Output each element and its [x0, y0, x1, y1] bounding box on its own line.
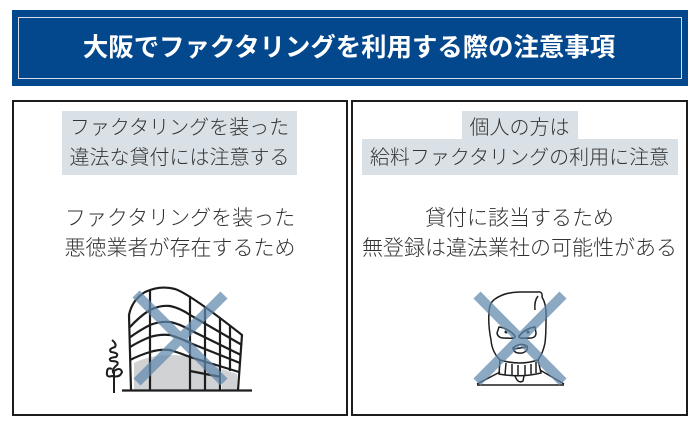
- highlighted heading: right line 2: [362, 139, 678, 175]
- heading text: left: ファクタリングを装った: [70, 117, 289, 139]
- highlighted heading: left: [62, 111, 297, 175]
- ground line: [122, 389, 252, 392]
- body text: right: 無登録は違法業社の可能性がある: [362, 236, 677, 260]
- heading text: left: [70, 117, 290, 168]
- heading text: left: 違法な貸付には注意する: [70, 146, 290, 168]
- body text: left: [64, 207, 296, 260]
- title: 大阪でファクタリングを利用する際の注意事項: [83, 34, 615, 62]
- title banner: [12, 10, 688, 86]
- panel: right warning: [351, 100, 688, 416]
- body text: right: 貸付に該当するため: [425, 207, 614, 230]
- heading text: right: 個人の方は: [470, 117, 570, 139]
- panel: left warning: [12, 100, 348, 416]
- mask outline: [477, 292, 564, 385]
- body text: right: [362, 207, 677, 260]
- highlighted heading: right line 1: [462, 111, 578, 140]
- body text: left: 悪徳業者が存在するため: [64, 236, 296, 260]
- banner inner border: [18, 17, 682, 79]
- heading text: right: 給料ファクタリングの利用に注意: [370, 146, 669, 168]
- heading text: right: [370, 117, 669, 168]
- cross mark: [477, 295, 563, 382]
- eyes: [504, 330, 508, 334]
- cross mark: [136, 294, 224, 382]
- building shaded ground floor: [134, 355, 237, 390]
- body text: left: ファクタリングを装った: [65, 207, 295, 230]
- building frame: [129, 288, 242, 390]
- icon: crossed out building: [106, 286, 252, 393]
- icon: crossed out masked person: [474, 291, 566, 386]
- tree: [107, 340, 122, 393]
